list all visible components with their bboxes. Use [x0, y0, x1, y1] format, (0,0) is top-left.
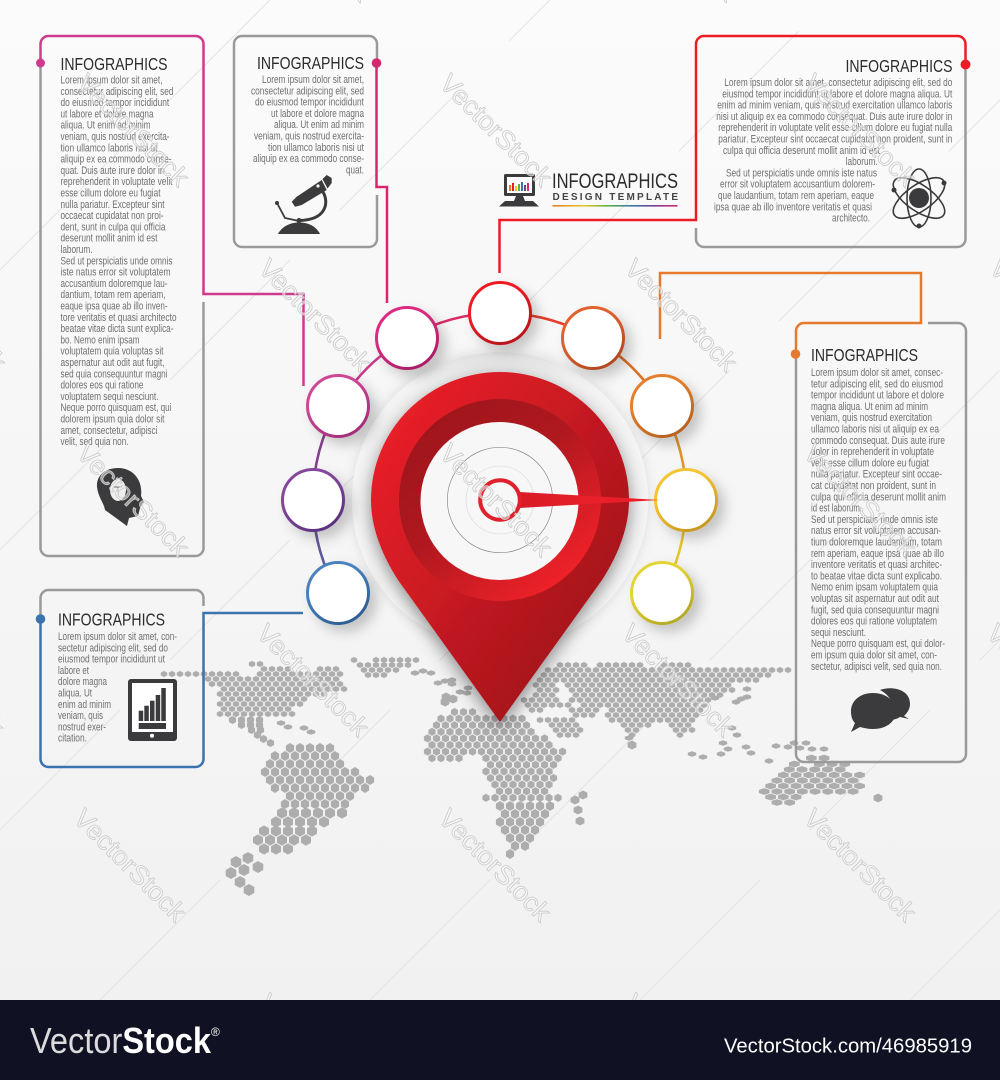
text: box 4 body: fugit, sed quia consequuntur magni: [811, 604, 939, 616]
text: box 3 body: culpa qui officia deserunt mollit anim id est: [723, 145, 880, 157]
text: box 4 body: commodo consequat. Duis aute irure: [811, 435, 945, 447]
text: box 4 body: veniam, quis nostrud exercitation: [811, 412, 932, 424]
continent: Africa: [423, 708, 567, 859]
step circles: [282, 282, 716, 624]
text: box 5 body: eiusmod tempor incididunt ut: [58, 654, 165, 666]
text: box 4 body: tetur adipiscing elit, sed do eiusmod: [811, 378, 943, 390]
text: box 1 body: Lorem ipsum dolor sit amet,: [60, 74, 163, 86]
text: box 4 body: tempor incididunt ut labore et dolore: [811, 390, 944, 402]
box 4 connector: [660, 273, 921, 354]
hub: [480, 480, 520, 520]
footer image id: VectorStock.com/46985919: [724, 1036, 972, 1058]
text: box 1 body: dolorem ipsum quia dolor sit: [60, 414, 165, 426]
pin body: [371, 372, 629, 722]
continent: South America: [226, 743, 375, 896]
rainbow underline: [552, 205, 678, 207]
text: box 4 body: Lorem ipsum dolor sit amet, consec-: [811, 367, 943, 379]
box 2 dot: [372, 58, 381, 68]
text: box 2 body: quat.: [346, 164, 364, 176]
box 4 grey outline: [796, 323, 966, 762]
text: box 5 body: labore et: [58, 665, 89, 677]
box 3 dot: [960, 60, 970, 70]
text: box 1 body: voluptatem sequi nesciunt.: [60, 391, 158, 403]
circle: blue: [308, 562, 368, 624]
box 3 connector: [500, 36, 966, 273]
text: box 4 body: magna aliqua. Ut enim ad minim: [811, 401, 928, 413]
text: box 4 body: Sed ut perspiciatis unde omnis iste: [811, 514, 938, 526]
text: box 1 body: reprehenderit in voluptate velit: [60, 176, 173, 188]
text: box 2 body: [251, 74, 364, 176]
title: box 1: INFOGRAPHICS: [60, 54, 168, 74]
text: box 1 body: iste natus error sit voluptatem: [60, 267, 171, 279]
text: box 2 body: aliquip ex ea commodo conse-: [253, 153, 364, 165]
text: box 1 body: occaecat cupidatat non proi-: [60, 210, 164, 222]
text: box 5 body: [58, 631, 177, 745]
text: box 3 body: laborum.: [846, 156, 878, 168]
icon: tablet with chart: [128, 679, 177, 741]
text: box 1 body: Sed ut perspiciatis unde omnis: [60, 255, 172, 267]
text: box 5 body: citation.: [58, 733, 87, 745]
text: box 4 body: sectetur, adipisci velit, sed quia non.: [811, 661, 942, 673]
icon: head with light bulb: [97, 468, 144, 526]
watermarks: VectorStock: [434, 438, 559, 563]
box 5 connector: [40, 613, 303, 767]
text: box 2 body: Lorem ipsum dolor sit amet,: [262, 74, 364, 86]
text: box 4 body: natus error sit voluptatem accusan-: [811, 525, 941, 537]
text: box 1 body: laborum.: [60, 244, 92, 256]
timeline connectors: [313, 313, 686, 593]
text: box 1 body: aliquip ex ea commodo conse-: [60, 154, 172, 166]
text: box 4 body: ullamco laboris nisi ut aliquip ex ea: [811, 424, 939, 436]
text: box 1 body: ut labore et dolore magna: [60, 108, 154, 120]
pin inner face: [420, 422, 578, 580]
icon: microscope: [275, 175, 332, 234]
icon: atom: [887, 169, 951, 228]
concentric radar rings: [447, 447, 553, 553]
box 4 dot: [791, 349, 800, 359]
panel: box 5 tablet: [36, 590, 303, 767]
logo subtitle: DESIGN TEMPLATE: [552, 192, 678, 203]
continent: Greenland: [350, 657, 420, 678]
text: box 4 body: rem aperiam, eaque ipsa quae ab illo: [811, 548, 944, 560]
box 5 grey outline: [40, 590, 204, 619]
watermarks: VectorStock: [71, 68, 196, 193]
text: box 1 body: sed quia consequuntur magni: [60, 368, 168, 380]
watermarks: VectorStock: [433, 803, 558, 928]
text: box 2 body: veniam, quis nostrud exercita-: [254, 130, 364, 142]
text: box 4 body: inventore veritatis et quasi architec-: [811, 559, 942, 571]
circle: purple: [282, 470, 344, 530]
text: box 1 body: deserunt mollit anim id est: [60, 233, 158, 245]
text: box 5 body: sectetur adipiscing elit, sed do: [58, 642, 168, 654]
pin ring: [399, 399, 601, 601]
box 2 grey outline: [234, 36, 377, 247]
text: box 1 body: do eiusmod tempor incididunt: [60, 97, 169, 109]
circle: pink: [376, 308, 438, 368]
box 3 grey outline: [696, 65, 966, 247]
watermarks: VectorStock: [619, 253, 744, 378]
watermarks: VectorStock: [798, 68, 923, 193]
circle: orange-red: [562, 308, 624, 368]
text: box 1 body: voluptatem quia voluptas sit: [60, 346, 164, 358]
islands: [277, 668, 882, 826]
text: box 4 body: nulla pariatur. Excepteur sint occae-: [811, 469, 942, 481]
text: box 1 body: dent, sunt in culpa qui officia: [60, 221, 166, 233]
text: box 1 body: amet, consectetur, adipisci: [60, 425, 158, 437]
panel: box 3 atom: [500, 36, 970, 273]
circle: yellow: [656, 470, 716, 530]
icon: monitor with bars: [499, 174, 539, 206]
watermarks: VectorStock: [71, 438, 196, 563]
watermarks: VectorStock: [68, 803, 193, 928]
text: box 5 body: aliqua. Ut: [58, 688, 92, 700]
text: box 1 body: tore veritatis et quasi architecto: [60, 312, 177, 324]
text: box 1 body: dolores eos qui ratione: [60, 380, 144, 392]
footer logo: VectorStock: [30, 1020, 212, 1061]
text: box 4 body: Neque porro quisquam est, qui dolor-: [811, 638, 945, 650]
text: box 4 body: Nemo enim ipsam voluptatem quia: [811, 582, 938, 594]
title: box 5: INFOGRAPHICS: [58, 610, 165, 630]
text: box 4 body: [811, 367, 946, 673]
text: box 5 body: veniam, quis: [58, 710, 103, 722]
watermarks: VectorStock: [251, 618, 376, 743]
title: box 3: INFOGRAPHICS: [846, 56, 952, 76]
text: box 5 body: Lorem ipsum dolor sit amet, con-: [58, 631, 177, 643]
text: box 3 body: que laudantium, totam rem aperiam, eaque: [718, 190, 874, 202]
watermarks: VectorStock: [253, 253, 378, 378]
text: box 1 body: aspernatur aut odit aut fugit,: [60, 357, 165, 369]
text: box 3 body: ipsa quae ab illo inventore veritatis et quasi: [714, 201, 872, 213]
text: box 5 body: enim ad minim: [58, 699, 111, 711]
text: box 1 body: veniam, quis nostrud exercita-: [60, 131, 170, 143]
logo title: INFOGRAPHICS: [552, 170, 678, 193]
continent: North America: [160, 661, 348, 747]
text: box 4 body: tium doloremque laudantium, totam: [811, 536, 942, 548]
title: box 2: INFOGRAPHICS: [257, 53, 364, 73]
watermarks: VectorStock: [434, 68, 559, 193]
text: box 2 body: aliqua. Ut enim ad minim: [274, 119, 364, 131]
panel: box 2 microscope: [234, 36, 387, 303]
text: box 1 body: dantium, totam rem aperiam,: [60, 289, 166, 301]
text: box 1 body: aliqua. Ut enim ad minim: [60, 120, 151, 132]
text: box 4 body: dolores eos qui ratione voluptatem: [811, 616, 937, 628]
watermarks: VectorStock: [798, 438, 923, 563]
text: box 4 body: em ipsum quia dolor sit amet, con-: [811, 650, 937, 662]
text: box 4 body: voluptas sit aspernatur aut odit aut: [811, 593, 939, 605]
box 5 dot: [36, 614, 45, 624]
text: box 2 body: consectetur adipiscing elit, sed: [251, 85, 364, 97]
text: box 1 body: beatae vitae dicta sunt explica-: [60, 323, 174, 335]
box 1 connector: [40, 36, 304, 386]
box 1 dot: [36, 58, 45, 68]
text: box 4 body: culpa qui officia deserunt mollit anim: [811, 491, 946, 503]
panel: box 4 speech: [660, 273, 966, 762]
footer bar: [0, 1000, 1000, 1080]
circle: red: [470, 282, 530, 344]
logo: infographics design template: [499, 170, 678, 207]
panel: box 1 pink: [36, 36, 304, 556]
text: box 1 body: esse cillum dolore eu fugiat: [60, 188, 161, 200]
text: box 1 body: bo. Nemo enim ipsam: [60, 334, 140, 346]
text: box 5 body: dolore magna: [58, 676, 107, 688]
text: box 1 body: quat. Duis aute irure dolor in: [60, 165, 165, 177]
continent: Australia: [758, 754, 866, 806]
text: box 5 body: nostrud exer-: [58, 721, 106, 733]
text: box 3 body: error sit voluptatem accusantium dolorem-: [720, 179, 875, 191]
text: box 1 body: velit, sed quia non.: [60, 436, 128, 448]
circle: orange: [632, 376, 692, 436]
text: box 1 body: Neque porro quisquam est, qui: [60, 402, 172, 414]
text: box 4 body: cat cupidatat non proident, sunt in: [811, 480, 936, 492]
watermarks: VectorStock: [798, 803, 923, 928]
text: box 4 body: sequi nesciunt.: [811, 627, 866, 639]
text: box 2 body: tion ullamco laboris nisi ut: [268, 142, 364, 154]
text: box 4 body: dolor in reprehenderit in voluptate: [811, 446, 934, 458]
box 1 grey outline: [40, 63, 204, 556]
text: box 3 body: Sed ut perspiciatis unde omnis iste natus: [726, 167, 877, 179]
text: box 4 body: to beatae vitae dicta sunt explicabo.: [811, 570, 942, 582]
text: box 1 body: tion ullamco laboris nisi ut: [60, 142, 158, 154]
text: box 4 body: id est laborum.: [811, 503, 862, 515]
backing disc: [352, 352, 648, 648]
circle: magenta: [308, 376, 368, 436]
text: box 4 body: velit esse cillum dolore eu fugiat: [811, 457, 929, 469]
text: box 1 body: nulla pariatur. Excepteur sint: [60, 199, 165, 211]
icon: speech bubbles: [851, 688, 910, 732]
dotted world map: [160, 657, 882, 896]
title: box 4: INFOGRAPHICS: [811, 345, 918, 365]
text: box 3 body: [714, 77, 952, 225]
map pin: [371, 372, 660, 722]
text: box 1 body: eaque ipsa quae ab illo inven-: [60, 300, 168, 312]
box 2 connector: [376, 63, 387, 303]
text: box 2 body: do eiusmod tempor incididunt: [255, 97, 364, 109]
needle: [519, 492, 660, 508]
registered mark: ®: [211, 1025, 220, 1039]
circle: lime: [632, 562, 692, 624]
text: box 1 body: accusantium doloremque lau-: [60, 278, 168, 290]
text: box 2 body: ut labore et dolore magna: [271, 108, 364, 120]
continent: Eurasia: [520, 662, 792, 738]
watermarks: VectorStock: [616, 618, 741, 743]
text: box 3 body: architecto.: [832, 213, 870, 225]
text: box 1 body: consectetur adipiscing elit, sed: [60, 86, 174, 98]
text: box 1 body: [60, 74, 177, 448]
